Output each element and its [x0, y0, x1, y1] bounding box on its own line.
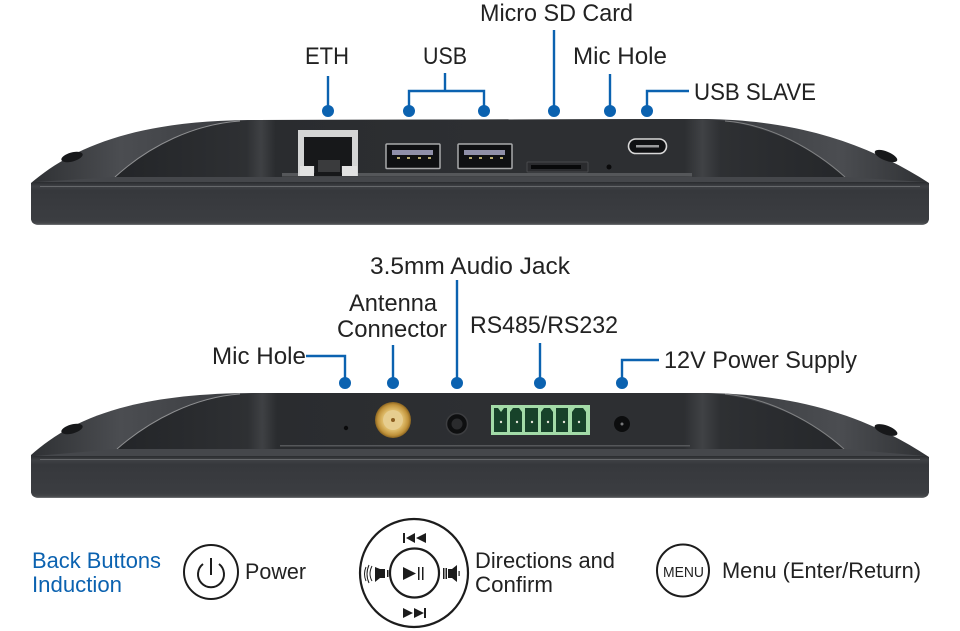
callout: 3.5mm Audio Jack: 3.5mm Audio Jack: [370, 253, 571, 280]
callout: RS485/RS232: RS485/RS232: [470, 312, 618, 339]
callout: ETH: ETH: [305, 43, 349, 70]
label: Power: Power: [245, 559, 306, 584]
callout: USB: USB: [423, 43, 467, 70]
port: SMA antenna connector: [375, 402, 411, 438]
callout: Antenna Connector: [337, 290, 447, 389]
port: USB-C: [628, 139, 666, 154]
callout: USB SLAVE: [641, 79, 816, 117]
callout: USB: [403, 43, 490, 117]
icon: menu button: MENU: [663, 565, 704, 581]
label: Directions and Confirm: [475, 548, 615, 597]
icon: power button: [184, 545, 238, 599]
label: Menu (Enter/Return): Menu (Enter/Return): [722, 558, 921, 583]
icon: directions and confirm dial: [360, 519, 468, 627]
callout: 12V Power Supply: 12V Power Supply: [664, 347, 857, 374]
port: mic hole: [344, 426, 348, 430]
device: top edge view: [31, 119, 929, 225]
callout: Mic Hole top: [573, 43, 667, 117]
callout: ETH: [305, 43, 349, 117]
callout: RS485/RS232: [470, 312, 618, 389]
callout: Mic Hole bottom: Mic Hole: [212, 343, 306, 370]
callout: Mic Hole bottom: [212, 343, 351, 389]
port: DC power jack: [614, 416, 630, 432]
callout: Antenna Connector: Antenna: [349, 290, 438, 317]
callout: Mic Hole top: Mic Hole: [573, 43, 667, 70]
port: green terminal block: [491, 405, 590, 435]
callout: Micro SD Card: Micro SD Card: [480, 0, 633, 27]
callout: 12V Power Supply: [616, 347, 857, 389]
callout: 3.5mm Audio Jack: [370, 253, 571, 389]
callout: USB SLAVE: USB SLAVE: [694, 79, 816, 106]
port: audio jack: [446, 414, 468, 434]
label: Directions and Confirm: Confirm: [475, 572, 553, 597]
callout: Antenna Connector: Connector: [337, 316, 447, 343]
heading: Back Buttons Induction: Induction: [32, 572, 122, 597]
device: bottom edge view: [31, 393, 929, 498]
icon: menu button: [657, 544, 709, 596]
port: mic hole: [606, 164, 612, 170]
port: micro SD slot: [527, 162, 588, 172]
port: ethernet: [298, 130, 358, 176]
callout: Micro SD Card: [480, 0, 633, 117]
heading: Back Buttons Induction: [32, 548, 161, 597]
label: Directions and Confirm: Directions and: [475, 548, 615, 573]
port: USB 1: [386, 144, 440, 168]
port: USB 2: [458, 144, 512, 168]
heading: Back Buttons Induction: Back Buttons: [32, 548, 161, 573]
